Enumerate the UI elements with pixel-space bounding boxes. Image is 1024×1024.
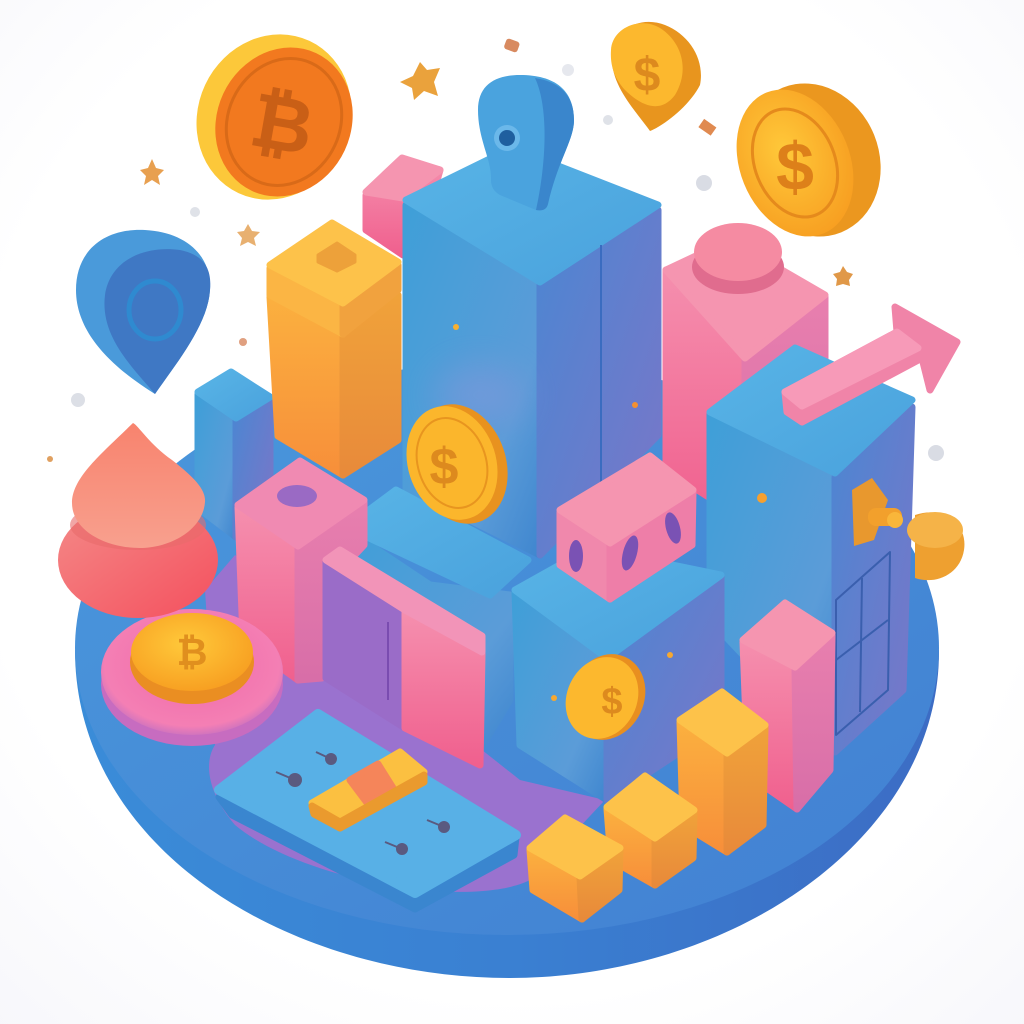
star bbox=[833, 266, 853, 286]
yellow clasp bbox=[312, 752, 424, 820]
pink back box bbox=[366, 158, 440, 255]
lid knob bbox=[318, 243, 355, 271]
coin top middle bbox=[611, 22, 701, 131]
center blue block bbox=[343, 490, 528, 750]
gold coin on front box: $ bbox=[601, 681, 623, 723]
speck bbox=[928, 445, 944, 461]
pink right tower bbox=[666, 223, 825, 520]
speck bbox=[696, 175, 712, 191]
pink small box bbox=[560, 456, 693, 599]
speck bbox=[698, 119, 716, 136]
star bbox=[140, 159, 164, 185]
bitcoin coin top: ₿ bbox=[244, 77, 320, 172]
right blue box bbox=[710, 348, 912, 752]
card dots bbox=[276, 752, 444, 849]
purple and pink box bbox=[326, 550, 482, 765]
dollar coin top right: $ bbox=[776, 129, 814, 205]
orange tall box bbox=[270, 223, 398, 475]
gold coin on front box bbox=[553, 641, 659, 753]
big blue tower bbox=[406, 148, 658, 555]
brass key on box bbox=[852, 478, 903, 546]
pink arrow bbox=[785, 307, 957, 422]
stars and specks bbox=[47, 38, 944, 462]
speck bbox=[47, 456, 53, 462]
front blue box bbox=[515, 548, 721, 800]
platform disc bbox=[75, 361, 939, 978]
speck bbox=[239, 338, 247, 346]
pink ring with coin: ₿ bbox=[177, 632, 207, 674]
map pin on tower bbox=[478, 75, 574, 210]
pink bar bbox=[743, 603, 832, 809]
pink box with purple glyph bbox=[238, 461, 364, 680]
card panel bbox=[219, 714, 516, 909]
speck bbox=[562, 64, 574, 76]
blue small back box bbox=[198, 372, 270, 537]
gold coin on tower: $ bbox=[430, 438, 459, 496]
orange bar tall bbox=[680, 692, 765, 852]
orange cube small bbox=[530, 818, 620, 919]
tower highlight bbox=[435, 365, 525, 425]
pink ring with coin bbox=[101, 609, 283, 746]
orange side ring bbox=[907, 512, 964, 580]
blue map pin bbox=[76, 230, 210, 394]
orange bar medium bbox=[607, 776, 694, 885]
gold coin on tower bbox=[392, 392, 523, 536]
pink cone bbox=[58, 423, 218, 618]
speck bbox=[71, 393, 85, 407]
speck bbox=[190, 207, 200, 217]
speck bbox=[603, 115, 613, 125]
star bbox=[400, 62, 440, 100]
speck bbox=[503, 38, 520, 53]
bitcoin coin top bbox=[170, 9, 378, 225]
dollar coin top right bbox=[716, 63, 903, 257]
purple inlay bbox=[205, 555, 605, 892]
door panel bbox=[836, 552, 890, 735]
coin top middle: $ bbox=[634, 49, 661, 102]
star bbox=[237, 224, 260, 246]
